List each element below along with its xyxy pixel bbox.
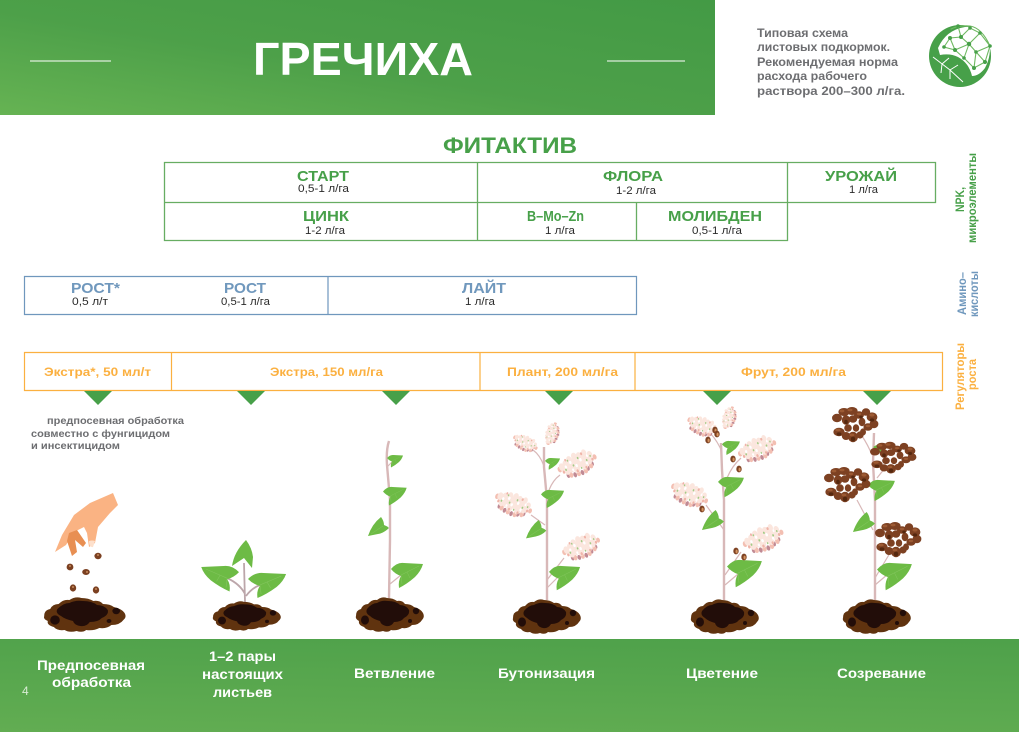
stage: branching: Ветвление: [354, 665, 435, 681]
panel: amino acids: РОСТ: [224, 280, 266, 297]
panel: NPK table: МОЛИБДЕН: [668, 208, 762, 225]
footer band with stage labels: 4: [22, 684, 29, 698]
panel: NPK table: 1-2 л/га: [616, 185, 657, 197]
stage arrows: [84, 391, 891, 405]
header description text: расхода рабочего: [757, 71, 867, 83]
panel: NPK table: 0,5-1 л/га: [692, 225, 743, 237]
panel: growth regulators: Плант, 200 мл/га: [507, 365, 618, 379]
stage: presowing: обработка: [52, 674, 131, 690]
panel: NPK table: ФЛОРА: [603, 168, 663, 185]
panel: amino acids: 0,5-1 л/га: [221, 296, 271, 308]
illustration: flowering plant: [666, 404, 788, 634]
panel: NPK table: УРОЖАЙ: [825, 167, 897, 185]
panel: NPK table: 1-2 л/га: [305, 225, 346, 237]
panel: amino acids: [24, 276, 636, 314]
panel: NPK table: СТАРТ: [297, 168, 349, 185]
panel: NPK table: 1 л/га: [545, 225, 576, 237]
stage: presowing: [37, 657, 145, 690]
header description text: Типовая схема: [757, 28, 849, 40]
panel: growth regulators: [24, 352, 942, 390]
panel: growth regulators: Экстра*, 50 мл/т: [44, 365, 151, 379]
title: ГРЕЧИХА: [253, 33, 473, 85]
footer band with stage labels: [0, 639, 1019, 732]
header description text: [757, 28, 905, 98]
stage: two pairs of leaves: настоящих: [202, 666, 283, 682]
note: presowing treatment: совместно с фунгицидом: [31, 428, 170, 440]
side label: NPK: NPK,: [955, 187, 967, 212]
panel: amino acids: 0,5 л/т: [72, 296, 108, 308]
stage: two pairs of leaves: 1–2 пары: [209, 648, 276, 664]
side label: NPK: микроэлементы: [967, 153, 979, 243]
note: presowing treatment: [31, 415, 184, 452]
stage: two pairs of leaves: листьев: [213, 684, 272, 700]
illustration: seedling: [201, 540, 286, 631]
panel: amino acids: ЛАЙТ: [462, 279, 506, 297]
side label: amino acids: Амино–: [957, 271, 969, 315]
side label: amino acids: [957, 271, 981, 317]
panel: NPK table: [164, 162, 936, 240]
note: presowing treatment: и инсектицидом: [31, 440, 120, 452]
side label: regulators: [955, 343, 979, 410]
panel: amino acids: 1 л/га: [465, 296, 496, 308]
note: presowing treatment: предпосевная обработка: [47, 415, 184, 427]
panel: growth regulators: Фрут, 200 мл/га: [741, 365, 846, 379]
stage: flowering: Цветение: [686, 665, 758, 681]
panel: NPK table: 0,5-1 л/га: [298, 183, 350, 195]
illustration: budding plant: [490, 420, 604, 634]
illustration: ripening plant: [824, 407, 921, 634]
stage: two pairs of leaves: [202, 648, 283, 700]
header banner: [0, 0, 715, 115]
heading: ФИТАКТИВ: ФИТАКТИВ: [443, 133, 577, 158]
panel: NPK table: ЦИНК: [303, 208, 350, 225]
panel: growth regulators: Экстра, 150 мл/га: [270, 365, 383, 379]
illustration: hand with seeds: [44, 493, 126, 632]
side label: regulators: роста: [967, 358, 979, 390]
panel: NPK table: 1 л/га: [849, 184, 879, 196]
illustration: branching plant: [356, 441, 424, 632]
stage: budding: Бутонизация: [498, 665, 595, 681]
header description text: листовых подкормок.: [757, 42, 890, 54]
panel: amino acids: РОСТ*: [71, 280, 120, 297]
stage: presowing: Предпосевная: [37, 657, 145, 673]
side label: amino acids: кислоты: [969, 271, 981, 317]
header description text: раствора 200–300 л/га.: [757, 86, 905, 98]
side label: regulators: Регуляторы: [955, 343, 967, 410]
icon: logo: [929, 24, 992, 87]
side label: NPK: [955, 153, 979, 243]
panel: NPK table: B–Mo–Zn: [527, 208, 584, 225]
header description text: Рекомендуемая норма: [757, 57, 899, 69]
stage: ripening: Созревание: [837, 665, 926, 681]
